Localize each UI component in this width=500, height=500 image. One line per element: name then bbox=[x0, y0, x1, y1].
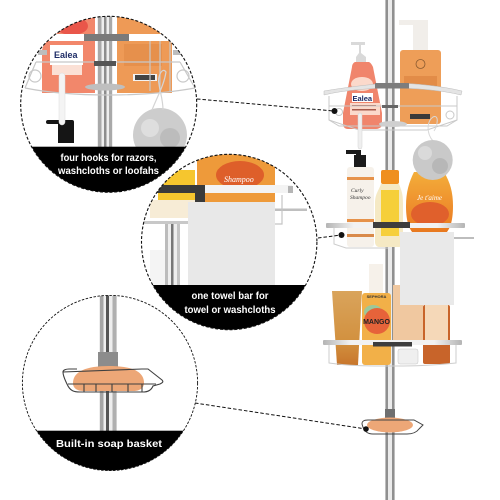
wire soap dish bbox=[63, 369, 163, 392]
caption band bbox=[152, 285, 305, 330]
rim close-up bbox=[205, 185, 292, 193]
product: top shelf with bottles bbox=[324, 20, 462, 149]
loofah close-up bbox=[133, 108, 187, 147]
cream tube bbox=[393, 285, 423, 341]
yellow bottle bbox=[375, 170, 403, 247]
caption second line: washcloths or loofahs bbox=[57, 165, 159, 177]
product: soap dish bbox=[362, 418, 423, 434]
gold tube bbox=[332, 291, 362, 365]
leader line: towel bar bbox=[318, 232, 344, 238]
caption: one towel bar for bbox=[192, 290, 268, 302]
bracket close-up bbox=[85, 61, 125, 90]
mango pump bottle: SEPHORA bbox=[367, 294, 387, 299]
white bottle with black pump: Shampoo bbox=[350, 195, 371, 201]
towel bar bbox=[450, 237, 474, 239]
orange pump bottle bbox=[399, 20, 441, 124]
leader line: soap basket bbox=[195, 403, 369, 432]
shelf two wire basket bbox=[334, 228, 448, 248]
shelf rim close-up bbox=[40, 34, 173, 41]
rim end cap bbox=[288, 186, 293, 193]
caption band bbox=[36, 430, 184, 471]
yellow bottle close-up bbox=[150, 170, 195, 218]
mango pump bottle: MANGO bbox=[363, 319, 390, 326]
loofah string close-up bbox=[152, 70, 166, 110]
loofah string bbox=[428, 116, 437, 141]
caption band bbox=[32, 146, 186, 192]
white towel bbox=[400, 232, 454, 305]
black pump close-up bbox=[46, 120, 74, 143]
shelf one centre bracket bbox=[379, 105, 407, 127]
amber shampoo bottle: Je t'aime bbox=[417, 194, 442, 202]
amber serum bottle bbox=[423, 305, 450, 364]
wire basket close-up bbox=[25, 41, 195, 95]
shelf one rim bbox=[324, 83, 462, 95]
circle outline bbox=[142, 154, 317, 330]
pole close-up bbox=[165, 224, 180, 285]
shelf two rim bbox=[326, 223, 465, 228]
soft white reflection bbox=[150, 250, 165, 285]
product: bottom shelf with bottles bbox=[323, 250, 462, 366]
shelf two clamp band bbox=[373, 222, 410, 228]
product: middle shelf with bottles bbox=[326, 140, 474, 305]
hook with white razor handle bbox=[358, 113, 362, 149]
shelf edge close-up bbox=[142, 221, 190, 224]
small jar bbox=[398, 349, 418, 364]
mango pump bottle bbox=[362, 264, 391, 365]
pink bottle close-up bbox=[42, 10, 95, 93]
circle outline bbox=[22, 295, 198, 471]
clamp band close-up bbox=[84, 34, 129, 41]
shelf one wire basket bbox=[329, 96, 457, 130]
rim end caps bbox=[38, 50, 181, 55]
caption: four hooks for razors, bbox=[60, 152, 157, 164]
towel bar close-up bbox=[275, 195, 307, 224]
shelf three wire basket bbox=[329, 345, 456, 366]
razor handle close-up bbox=[59, 73, 65, 125]
circle callout: four hooks bbox=[20, 16, 198, 193]
amber shampoo bottle bbox=[406, 172, 453, 233]
orange bottle close-up bbox=[117, 10, 172, 93]
white bottle with black pump bbox=[346, 150, 374, 247]
amber bottle close-up bbox=[197, 154, 275, 202]
caption second line: towel or washcloths bbox=[184, 304, 276, 316]
loofah bbox=[413, 140, 453, 180]
towel hanging overlap bbox=[400, 250, 454, 305]
shelf one clamp band bbox=[375, 83, 409, 88]
amber bottle close-up: Shampoo bbox=[224, 175, 254, 184]
leader line: hooks bbox=[197, 99, 338, 114]
pole close-up bbox=[97, 10, 113, 147]
caption: Built-in soap basket bbox=[56, 438, 163, 450]
circle callout: soap basket bbox=[22, 295, 198, 471]
shelf three rim bbox=[323, 340, 462, 345]
shelf three clamp band bbox=[373, 342, 412, 346]
dark clamp close-up bbox=[155, 185, 205, 202]
white bottle with black pump: Curly bbox=[351, 188, 364, 194]
pink bottle close-up: Ealea bbox=[54, 50, 79, 60]
circle callout: towel bar bbox=[140, 154, 318, 330]
pole close-up bbox=[98, 290, 118, 431]
towel close-up bbox=[188, 202, 275, 285]
pink soap bottle: Ealea bbox=[352, 94, 373, 103]
circle outline bbox=[21, 16, 197, 192]
product: full tension pole bbox=[385, 0, 395, 500]
soap bar bbox=[73, 366, 144, 391]
